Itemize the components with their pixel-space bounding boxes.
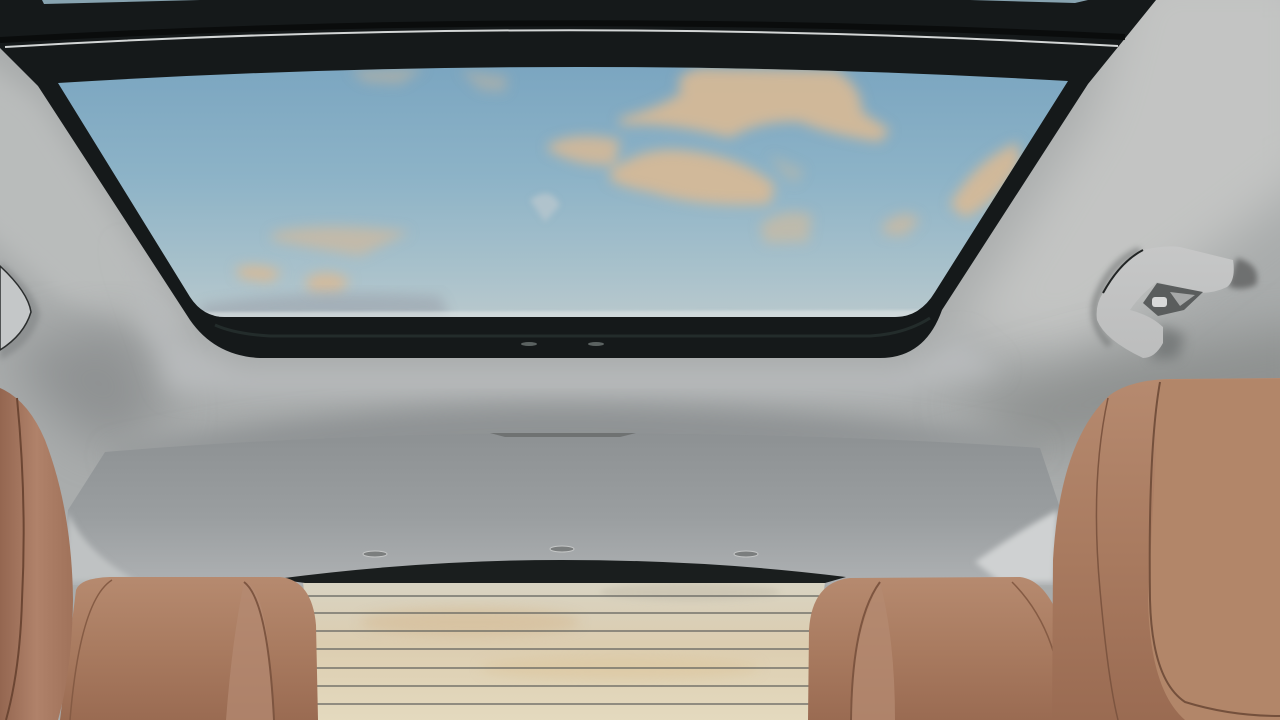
sunroof frame: [0, 0, 1156, 358]
right rear headrest: [808, 577, 1060, 720]
handle recess shadows: [1228, 258, 1257, 289]
handle body: [1097, 246, 1234, 358]
rear window dark top seal: [276, 560, 846, 583]
shadow above lower panel: [110, 405, 1040, 460]
right lower shadow: [960, 320, 1280, 450]
right pillar highlight: [975, 510, 1058, 582]
right grab handle: [1095, 246, 1257, 360]
lower headliner panel: [60, 433, 1064, 585]
left pillar shadow: [10, 320, 170, 450]
left rear headrest: [60, 577, 318, 720]
clouds: [200, 68, 1020, 320]
left pillar highlight: [66, 512, 135, 582]
rear window: [295, 578, 835, 720]
rear speaker slot: [490, 433, 636, 437]
right front headrest: [1052, 378, 1280, 720]
right roof light area: [950, 0, 1280, 350]
left roof light area: [0, 50, 190, 340]
sliver of front sky at top: [42, 0, 1088, 4]
roof rear buttons: [363, 546, 758, 557]
reading light switch: [1143, 283, 1203, 316]
sunroof glass: sky and clouds: [40, 60, 1080, 322]
left grab handle: [0, 262, 40, 360]
left front headrest: [0, 388, 73, 720]
light strip under frame: [120, 240, 1000, 395]
